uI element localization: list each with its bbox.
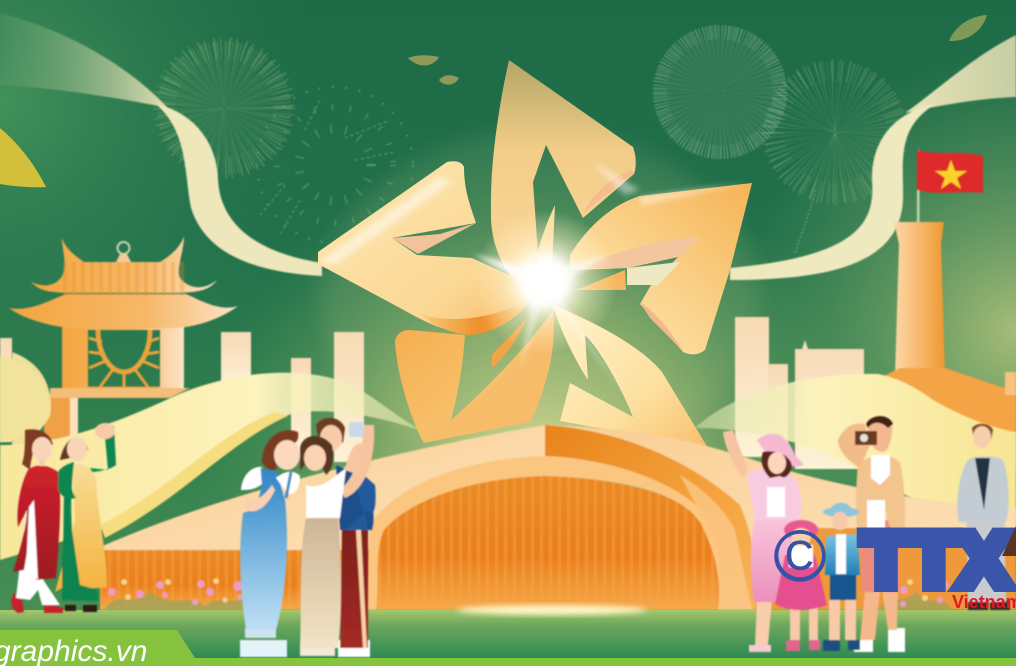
gate base beam (50, 388, 190, 398)
building: left high tower (334, 332, 364, 462)
arch frame peach (362, 456, 753, 610)
tower base (880, 368, 1016, 470)
flower emblem (318, 60, 760, 470)
ribbon: top right (730, 35, 1016, 280)
bottom lime strip (0, 658, 1016, 666)
icon: leaf top centre (408, 55, 439, 65)
red flag tower (880, 150, 1016, 470)
man with camera (838, 416, 905, 652)
right lower wall (760, 528, 1016, 610)
building: right wide block (795, 340, 864, 469)
firework: top left pale yellow burst (164, 48, 284, 168)
light rays (318, 160, 750, 395)
petal: top (491, 60, 636, 285)
people: ao dai women (11, 423, 116, 613)
firework: sparse sparkles centre left (257, 87, 413, 243)
building: left tower (221, 332, 251, 392)
woman in green and yellow ao dai (55, 423, 116, 612)
flag: Vietnam (917, 150, 983, 193)
ribbon through flower (627, 262, 680, 285)
pillars and lintel (62, 316, 184, 388)
centre slender petal (537, 205, 555, 270)
woman in white top and beige trousers (300, 436, 364, 656)
ribbon: top left (0, 13, 322, 276)
gate pavilion (9, 236, 238, 470)
glow behind flower (320, 130, 760, 470)
man in navy jacket and maroon pants (316, 418, 376, 657)
girl in blue overalls (240, 430, 300, 657)
flag pole (917, 150, 920, 225)
flowers right (880, 579, 950, 610)
copyright symbol: © (774, 517, 826, 596)
icon: small leaf (439, 75, 459, 85)
sun window lattice (88, 330, 160, 388)
peach right roof (545, 425, 1016, 555)
petal left orange underside (420, 302, 528, 335)
people: selfie group (240, 418, 376, 657)
building: right second tower (768, 364, 788, 454)
light core (473, 210, 617, 354)
girl in pink dress (775, 520, 827, 651)
boy in blue vest (823, 503, 860, 651)
gate lower post (44, 398, 78, 442)
logo: TTXVN watermark (774, 517, 1016, 612)
petal: left (318, 161, 532, 334)
floating leaves (0, 15, 987, 187)
peach left roof (98, 425, 545, 550)
woman in red ao dai (11, 429, 63, 613)
arch inner stripes (372, 476, 718, 610)
firework: thin burst right (773, 70, 897, 255)
stage building (98, 425, 1016, 610)
fireworks (164, 32, 897, 255)
dark corner mark (1002, 526, 1016, 556)
orange band (545, 425, 757, 610)
people: family at right (723, 416, 1010, 652)
man in grey suit (957, 424, 1010, 610)
icon: leaf top right (949, 15, 987, 41)
flowers left (105, 578, 245, 610)
building: right tall tower (735, 317, 769, 457)
icon: yellow leaf left edge (0, 128, 46, 187)
building: left small tower (291, 358, 311, 453)
tower shaft (894, 222, 945, 375)
roof ring ornament (116, 242, 131, 262)
yellow wave: right (695, 374, 1016, 535)
TTX wordmark: TTX (862, 518, 1010, 603)
lower roof (9, 294, 238, 328)
petal: bottom right (553, 305, 708, 448)
building: left edge tower (0, 338, 12, 442)
upper roof (31, 236, 217, 293)
flag star (935, 160, 967, 189)
orange lower wall (100, 548, 770, 610)
pale swirl (12, 352, 51, 470)
stage light glow (457, 605, 647, 615)
yellow wave: left (0, 355, 425, 560)
firework: dense grey-green burst top centre right (660, 32, 780, 152)
lime tab (0, 630, 195, 666)
petal: bottom left (395, 310, 554, 443)
petal: right (570, 183, 752, 354)
city skyline (0, 317, 864, 469)
ground: green lawn (0, 610, 1016, 658)
woman with pink hat (723, 430, 804, 652)
